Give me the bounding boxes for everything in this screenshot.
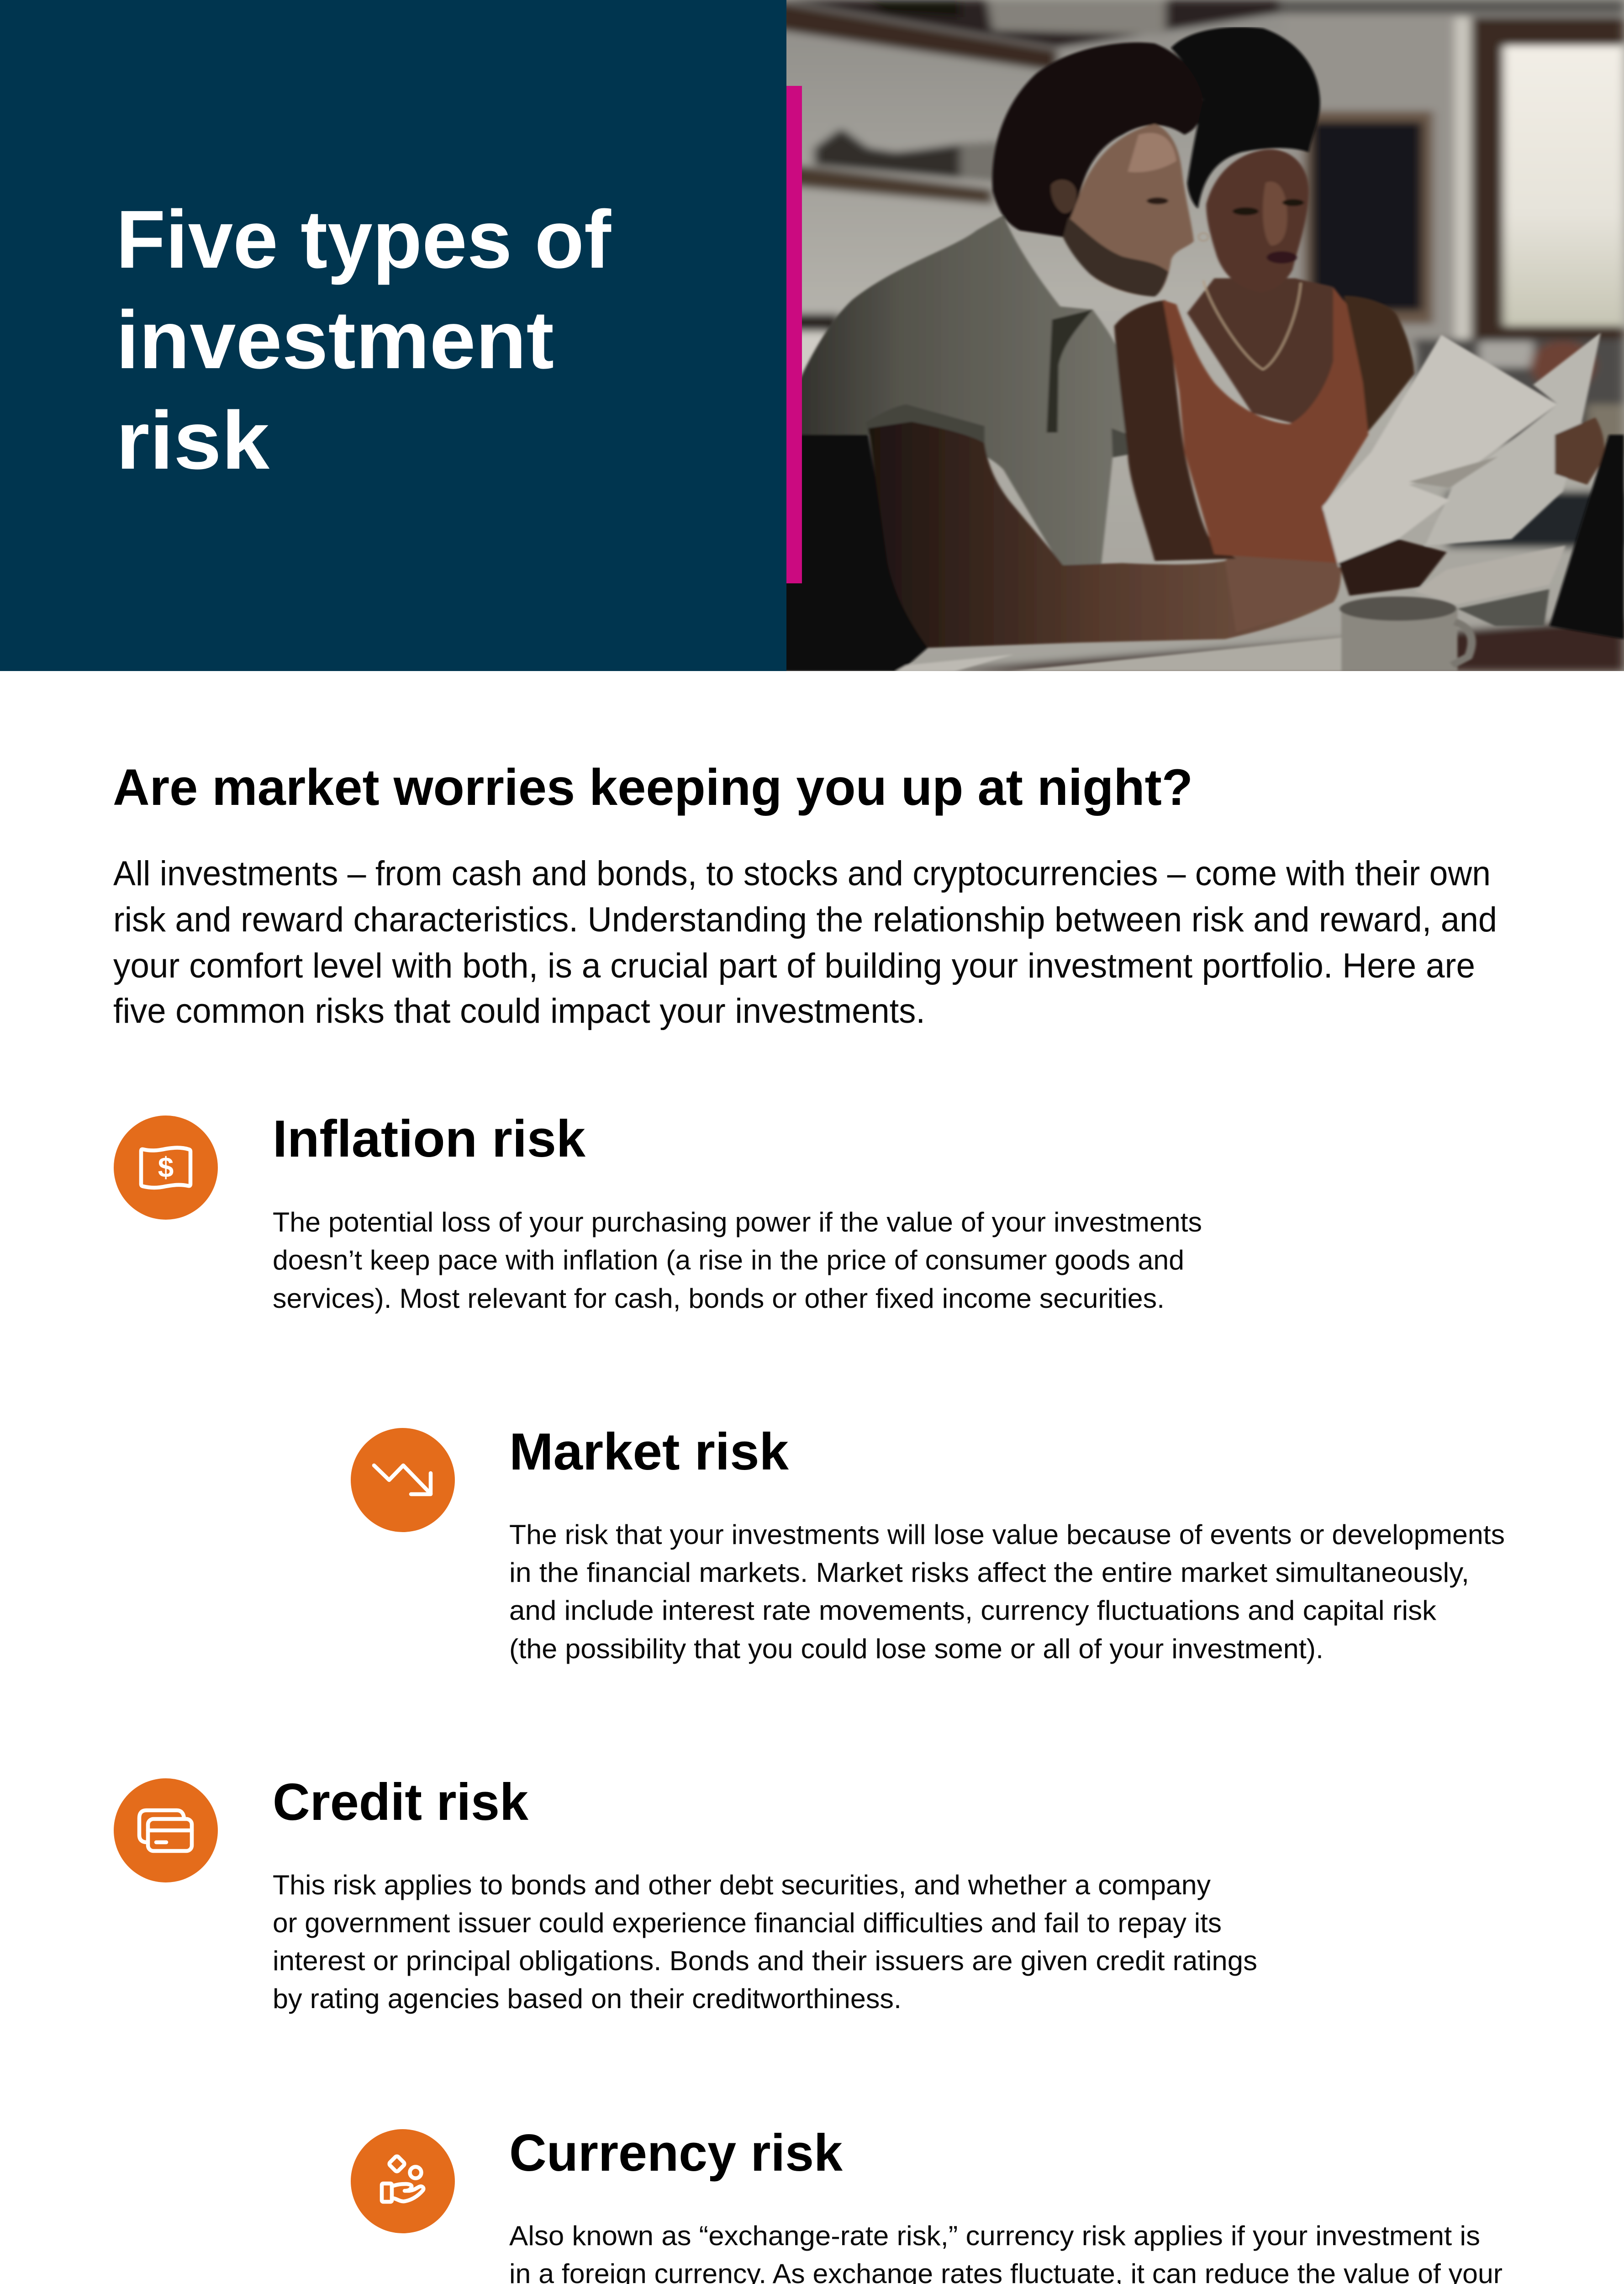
intro paragraph: your comfort level with both, is a crucial part of building your investment portfolio. Here are — [113, 946, 1475, 985]
title — [116, 194, 612, 486]
header panel — [0, 0, 786, 671]
title: risk — [116, 395, 270, 486]
photo background — [776, 0, 1624, 671]
text: currency risk description: Also known as “exchange-rate risk,” currency risk applies if your investment is — [509, 2221, 1480, 2251]
text: currency risk description — [509, 2221, 1503, 2284]
text: market risk description: The risk that your investments will lose value because of events or developments — [509, 1519, 1505, 1550]
text: credit risk description — [273, 1870, 1257, 2014]
section heading: Are market worries keeping you up at night? — [113, 759, 1193, 816]
text: inflation risk description — [273, 1207, 1202, 1314]
text: credit risk description: interest or principal obligations. Bonds and their issuers are given credit ratings — [273, 1946, 1257, 1976]
photo: couple reviewing documents at kitchen table — [776, 0, 1624, 671]
heading: market risk: Market risk — [509, 1423, 789, 1481]
text: market risk description: in the financial markets. Market risks affect the entire market simultaneously, — [509, 1557, 1469, 1588]
text: inflation risk description: The potential loss of your purchasing power if the value of your investments — [273, 1207, 1202, 1237]
heading: currency risk: Currency risk — [509, 2124, 843, 2182]
intro paragraph: five common risks that could impact your investments. — [113, 992, 925, 1031]
icon: hand with coins — [351, 2129, 455, 2233]
panel: credit risk — [114, 1773, 1257, 2014]
title: investment — [116, 294, 554, 386]
panel: currency risk — [351, 2124, 1503, 2284]
text: market risk description: and include interest rate movements, currency fluctuations and capital risk — [509, 1595, 1437, 1626]
text: credit risk description: or government issuer could experience financial difficulties and fail to repay its — [273, 1908, 1222, 1938]
panel: market risk — [351, 1423, 1505, 1664]
icon: falling trend arrow — [351, 1428, 455, 1532]
icon: banknote — [114, 1116, 218, 1220]
text: market risk description: (the possibility that you could lose some or all of your investment). — [509, 1634, 1323, 1664]
text: inflation risk description: doesn’t keep pace with inflation (a rise in the price of consumer goods and — [273, 1245, 1184, 1275]
text: credit risk description: by rating agencies based on their creditworthiness. — [273, 1983, 902, 2014]
intro paragraph: risk and reward characteristics. Understanding the relationship between risk and reward, and — [113, 900, 1497, 939]
photo people and foreground — [776, 27, 1624, 671]
icon: banknote: $ — [158, 1152, 174, 1184]
heading: credit risk: Credit risk — [273, 1773, 529, 1831]
text: credit risk description: This risk applies to bonds and other debt securities, and whether a company — [273, 1870, 1211, 1900]
text: market risk description — [509, 1519, 1505, 1664]
icon: credit cards — [114, 1778, 218, 1882]
title: Five types of — [116, 194, 612, 286]
intro paragraph: All investments – from cash and bonds, to stocks and cryptocurrencies – come with their own — [113, 854, 1491, 893]
intro paragraph — [113, 854, 1497, 1031]
text: inflation risk description: services). Most relevant for cash, bonds or other fixed income securities. — [273, 1283, 1165, 1314]
magenta accent bar — [786, 86, 802, 583]
panel: inflation risk — [114, 1110, 1202, 1314]
heading: inflation risk: Inflation risk — [273, 1110, 586, 1168]
